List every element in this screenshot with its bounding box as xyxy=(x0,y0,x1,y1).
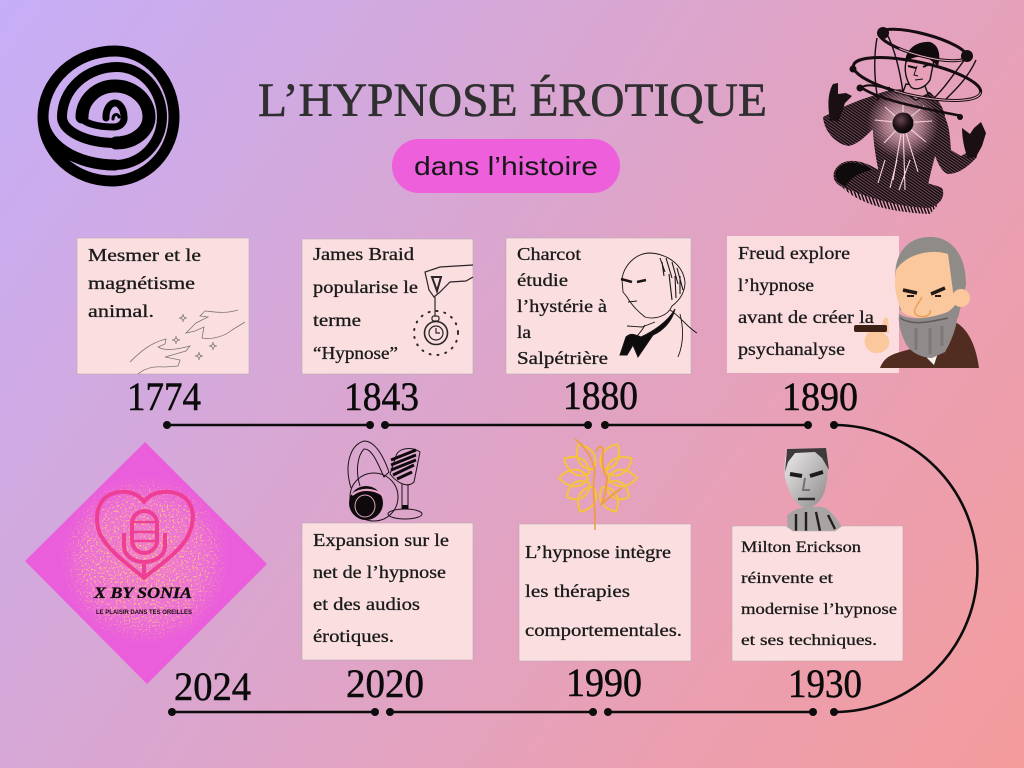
panel: 1843 James Braid: terme xyxy=(313,310,361,330)
orbit rings xyxy=(850,23,984,116)
panel: 1890 Freud: avant de créer la xyxy=(738,307,874,327)
eyes and brows xyxy=(903,288,945,294)
portrait: Freud cartoon xyxy=(854,237,979,368)
beard xyxy=(899,308,958,358)
text block: Freud explore xyxy=(738,243,850,263)
panel: 1930 Milton Erickson: réinvente et xyxy=(741,570,834,587)
panel: 2020 audios: net de l’hypnose xyxy=(313,562,446,582)
icon: hand with pendulum watch xyxy=(414,265,473,355)
mic head grille xyxy=(391,450,416,479)
panel: 1774 Mesmer: magnétisme xyxy=(88,273,195,293)
panel: 2020 audios xyxy=(302,523,473,660)
text block: L’hypnose intègre xyxy=(525,542,671,562)
text block: James Braid xyxy=(313,244,414,264)
panel: 1843 James Braid: popularise le xyxy=(313,277,418,297)
brand name: X BY SONIA xyxy=(93,585,192,602)
crossed legs xyxy=(834,161,943,208)
panel: 1880 Charcot: la xyxy=(517,322,531,342)
text block: Milton Erickson xyxy=(741,539,861,556)
panel: 1890 Freud: psychanalyse xyxy=(738,339,845,359)
panel: 1880 Charcot: Salpétrière xyxy=(517,348,608,368)
chest aura xyxy=(867,87,939,159)
year: 2024: 2024 xyxy=(174,664,251,709)
torso xyxy=(872,89,945,188)
panel: 1990 therapies: comportementales. xyxy=(525,620,682,640)
title: L’HYPNOSE ÉROTIQUE xyxy=(258,74,767,127)
icon: butterfly woman xyxy=(559,439,637,530)
icon: heart with microphone xyxy=(97,492,193,578)
panel: 1774 Mesmer: animal. xyxy=(88,301,154,321)
glowing sphere xyxy=(892,112,914,134)
jacket xyxy=(880,323,979,368)
panel: 1890 Freud: l’hypnose xyxy=(738,275,814,295)
left hand xyxy=(828,83,852,122)
text block: Expansion sur le xyxy=(313,530,449,550)
tagline: LE PLAISIR DANS TES OREILLES xyxy=(96,609,192,616)
year: 2020: 2020 xyxy=(346,661,424,706)
neck and head xyxy=(903,84,928,100)
panel: 1843 James Braid xyxy=(302,239,473,374)
year: 1843: 1843 xyxy=(344,374,419,419)
subtitle pill xyxy=(392,139,620,193)
panel: 1930 Milton Erickson xyxy=(732,526,903,661)
panel: 2020 audios: et des audios xyxy=(313,594,420,614)
illustration: meditating man with orbits xyxy=(823,23,986,214)
text block: Mesmer et le xyxy=(88,245,201,265)
face xyxy=(895,252,955,318)
year: 1990: 1990 xyxy=(566,660,642,705)
panel: 1930 Milton Erickson: modernise l’hypnose xyxy=(741,601,897,618)
timeline: top row and return curve xyxy=(163,421,977,716)
light rays xyxy=(875,102,932,190)
logo: X by Sonia diamond xyxy=(25,442,267,684)
subtitle pill: dans l’histoire xyxy=(414,151,598,181)
ear xyxy=(952,289,970,307)
panel: 1930 Milton Erickson: et ses techniques. xyxy=(741,632,877,649)
panel: 1990 therapies xyxy=(519,524,691,661)
ear cup xyxy=(349,486,383,520)
right hand xyxy=(962,122,986,158)
hair xyxy=(895,237,966,318)
portrait: Milton Erickson photo xyxy=(785,448,843,532)
panel: 1880 Charcot: étudie xyxy=(517,270,568,290)
year: 1880: 1880 xyxy=(563,373,638,418)
panel: 1890 Freud xyxy=(727,236,899,373)
panel: 1774 Mesmer xyxy=(77,238,249,374)
fringe below legs xyxy=(836,180,938,214)
orbit ring highlights xyxy=(850,23,984,109)
text block: Charcot xyxy=(517,244,581,264)
icon: headphones and microphone xyxy=(348,441,422,521)
cigar and hand xyxy=(865,330,889,353)
orange stem overlap xyxy=(594,524,596,530)
panel: 2020 audios: érotiques. xyxy=(313,626,394,646)
year: 1930: 1930 xyxy=(788,661,862,706)
panel: 1990 therapies: les thérapies xyxy=(525,581,630,601)
orbit spheres xyxy=(850,27,973,120)
portrait: Charcot engraving xyxy=(620,253,697,357)
icon: reaching hands with sparkles xyxy=(130,310,245,374)
right arm xyxy=(928,113,977,174)
panel: 1880 Charcot: l’hystérie à xyxy=(517,296,607,316)
icon: hypnotic spiral xyxy=(43,51,174,181)
year: 1890: 1890 xyxy=(782,374,858,419)
year: 1774: 1774 xyxy=(127,374,201,419)
panel: 1843 James Braid: “Hypnose” xyxy=(313,343,398,363)
left arm xyxy=(823,95,878,146)
panel: 1880 Charcot xyxy=(506,238,697,374)
